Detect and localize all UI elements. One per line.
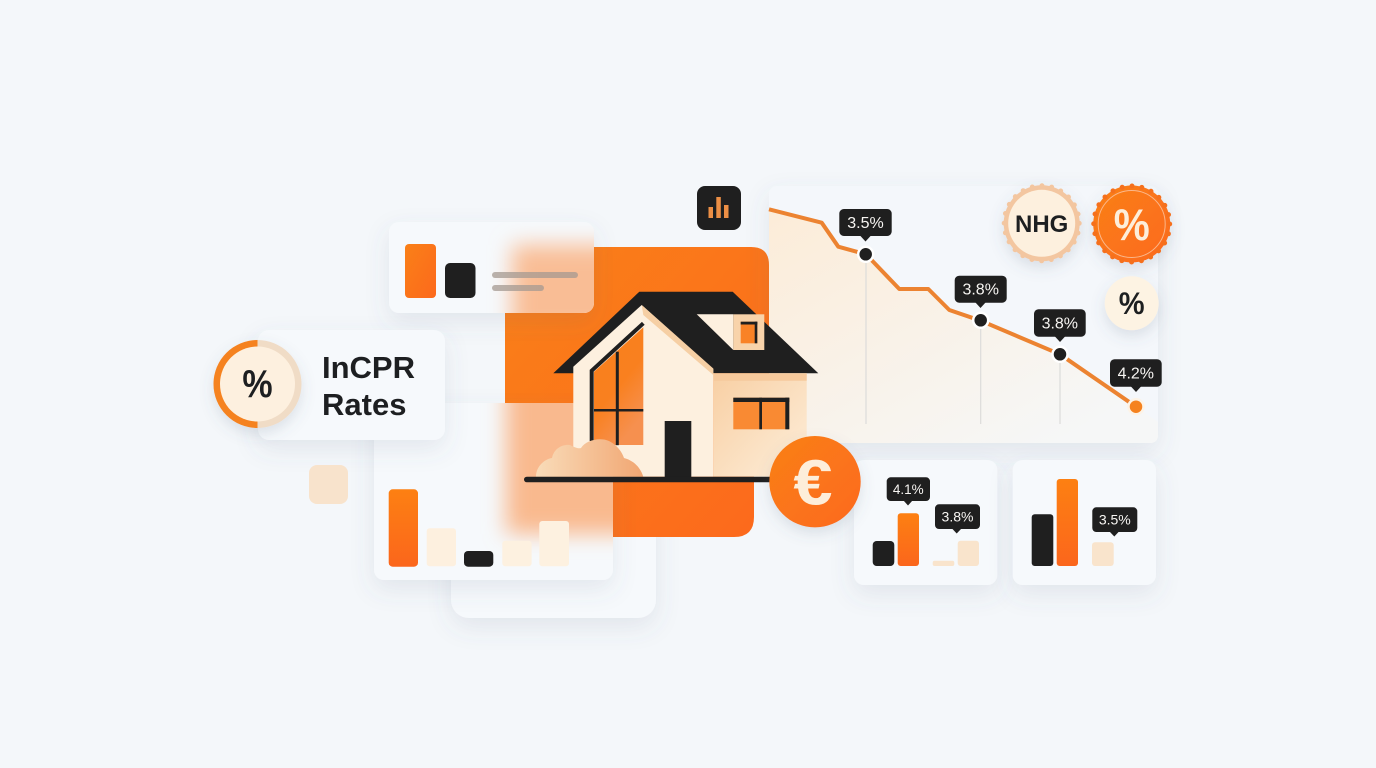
chart area fill — [769, 209, 1158, 443]
callout: 4.1%: 4.1% — [893, 482, 924, 497]
bar chart: five bars — [389, 489, 569, 567]
panel: bar card with 4.1% and 3.8% — [854, 460, 997, 585]
panel: title label card — [258, 330, 445, 440]
callout: 3.5%: 3.5% — [1099, 512, 1131, 528]
drop lines — [866, 254, 1060, 424]
callout: 3.5% — [1092, 507, 1137, 536]
badge: small percent: % — [1119, 287, 1145, 321]
callout: 3.5% — [839, 209, 892, 242]
callout: 3.8%: 3.8% — [942, 508, 973, 524]
title: Rates — [322, 387, 406, 422]
icon: small bar chart tile — [697, 186, 741, 230]
callout: 4.1% — [887, 477, 930, 506]
bars — [873, 513, 979, 566]
badge: NHG: NHG — [1015, 211, 1068, 238]
callout: 3.8% — [1034, 309, 1086, 342]
icon: percent ring — [214, 340, 302, 428]
roof edge — [642, 305, 713, 375]
panel: line chart — [769, 186, 1162, 443]
callout: 3.5%: 3.5% — [847, 215, 884, 232]
callout: 3.8%: 3.8% — [1042, 316, 1078, 332]
orange backdrop square — [505, 247, 769, 537]
icon: house — [524, 292, 818, 482]
badge: percent orange — [1093, 186, 1170, 262]
callout: 3.8%: 3.8% — [962, 282, 999, 299]
panel: bottom-left bar chart card — [372, 403, 616, 592]
side window — [733, 398, 789, 429]
badge: small percent — [1105, 276, 1159, 330]
front gable wall — [573, 305, 713, 477]
title: InCPR — [322, 350, 415, 385]
panel: back card — [451, 500, 656, 618]
dormer — [697, 314, 764, 350]
right wall — [713, 373, 807, 477]
rate line — [769, 209, 1136, 407]
bush — [536, 439, 643, 477]
bars — [1032, 479, 1114, 566]
icon: percent ring: % — [242, 362, 273, 406]
ground line — [524, 477, 774, 482]
callout: 4.2%: 4.2% — [1118, 366, 1154, 382]
callout: 4.2% — [1110, 359, 1162, 392]
callout: 3.8% — [935, 504, 980, 534]
roof — [553, 292, 818, 373]
icon: euro coin — [769, 436, 861, 527]
icon: euro coin: € — [793, 447, 833, 519]
door — [665, 421, 691, 479]
decorative peach square icon — [309, 465, 348, 504]
badge: percent orange: % — [1114, 200, 1150, 250]
bars — [405, 244, 476, 298]
callout: 3.8% — [955, 276, 1007, 308]
data points — [858, 247, 1144, 414]
placeholder text lines — [492, 272, 578, 291]
panel: top bar card — [387, 232, 597, 325]
tall window — [592, 323, 643, 445]
badge: NHG — [1004, 185, 1080, 261]
panel: bar card with 3.5% — [1013, 460, 1156, 585]
